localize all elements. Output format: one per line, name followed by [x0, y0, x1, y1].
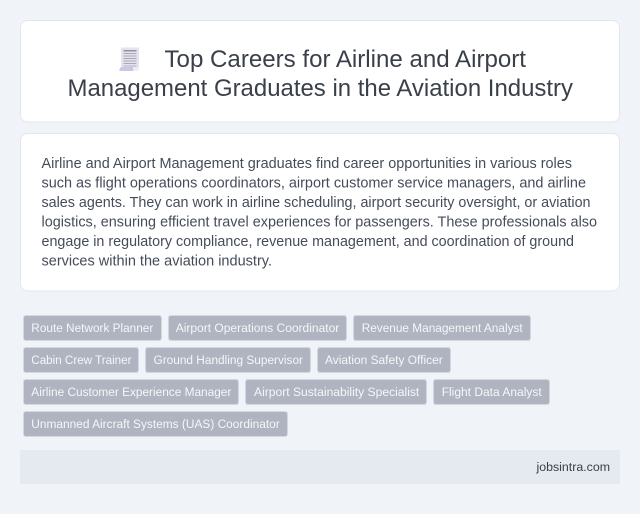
tag: Unmanned Aircraft Systems (UAS) Coordinator — [24, 412, 288, 436]
tag: Airport Operations Coordinator — [168, 316, 346, 340]
tag: Flight Data Analyst: Flight Data Analyst — [442, 385, 542, 399]
tag: Airline Customer Experience Manager: Airline Customer Experience Manager — [31, 385, 231, 399]
text block: description: sales agents. They can work in airline scheduling, airport security oversight, or aviation — [42, 195, 590, 211]
tag: Unmanned Aircraft Systems (UAS) Coordinator: Unmanned Aircraft Systems (UAS) Coordinator — [31, 417, 280, 431]
panel: description card — [20, 134, 620, 291]
tag: Airport Sustainability Specialist — [246, 380, 426, 404]
text block: description: services within the aviation industry. — [42, 254, 272, 270]
tag: Route Network Planner: Route Network Planner — [31, 321, 153, 335]
tag: Route Network Planner — [24, 316, 162, 340]
panel: title card — [20, 20, 620, 122]
text block: description: such as flight operations coordinators, airport customer service managers, and airline — [42, 176, 586, 192]
tag: Aviation Safety Officer: Aviation Safety Officer — [325, 353, 443, 367]
text block: description: Airline and Airport Management graduates find career opportunities in various roles — [42, 156, 572, 172]
icon: paper scroll — [119, 48, 139, 71]
footer text: source: jobsintra.com — [536, 460, 610, 474]
tag: Ground Handling Supervisor — [146, 348, 310, 372]
tag: Ground Handling Supervisor: Ground Handling Supervisor — [154, 353, 303, 367]
tag: Revenue Management Analyst: Revenue Management Analyst — [362, 321, 523, 335]
tag: Flight Data Analyst — [434, 380, 550, 404]
tag: Cabin Crew Trainer: Cabin Crew Trainer — [31, 353, 131, 367]
tag: Cabin Crew Trainer — [24, 348, 138, 372]
text block: description: engage in regulatory compliance, revenue management, and coordination of ground — [42, 234, 574, 250]
heading: Management Graduates in the Aviation Industry — [68, 75, 574, 102]
footer bar — [20, 450, 620, 484]
heading — [68, 46, 574, 102]
tag: Revenue Management Analyst — [354, 316, 530, 340]
tag: Aviation Safety Officer — [318, 348, 450, 372]
tag list: careers — [24, 316, 550, 436]
heading: Top Careers for Airline and Airport — [164, 46, 526, 73]
tag: Airport Sustainability Specialist: Airport Sustainability Specialist — [254, 385, 420, 399]
text block: description — [42, 156, 597, 270]
tag: Airline Customer Experience Manager — [24, 380, 238, 404]
tag: Airport Operations Coordinator: Airport Operations Coordinator — [176, 321, 339, 335]
text block: description: logistics, ensuring efficient travel experiences for passengers. These professionals also — [42, 214, 597, 230]
